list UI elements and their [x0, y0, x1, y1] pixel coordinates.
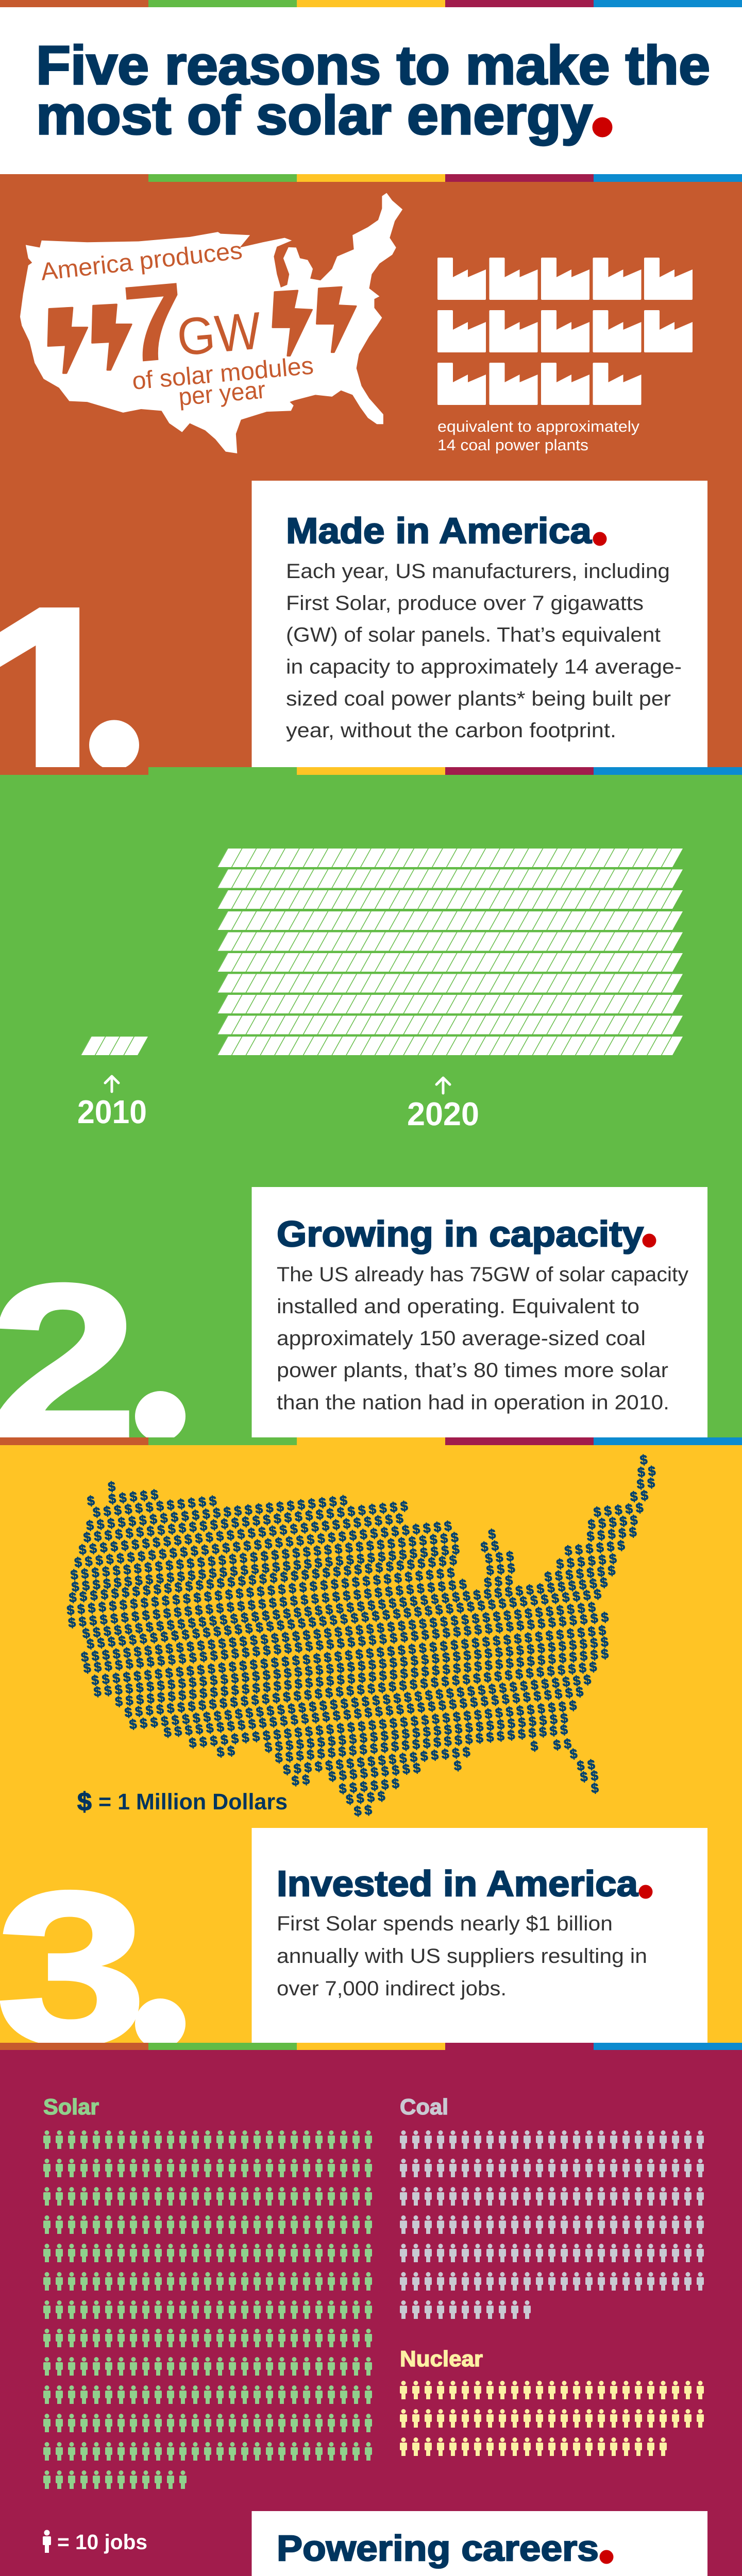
- card: invested in America text: over 7,000 indirect jobs.: [277, 1977, 507, 2000]
- legend: dollar scale: $: [77, 1787, 92, 1816]
- map: United States made of dollar signs: $$$: [483, 1572, 517, 1590]
- map: United States made of dollar signs: $$$$$$$$$$$$$$$$$$$$$$$$$$$$$$$$$$$$$$: [68, 1576, 470, 1631]
- map: United States made of dollar signs: $: [453, 1757, 465, 1774]
- card: made in America text: First Solar, produce over 7 gigawatts: [286, 592, 644, 615]
- map: United States made of dollar signs: $$$$$: [587, 1512, 642, 1532]
- map: United States with 7GW label: America produces: [39, 237, 244, 286]
- map: United States made of dollar signs: $$: [637, 1463, 660, 1480]
- card: made in America text: Made in America: [286, 511, 592, 551]
- map: United States made of dollar signs: $$$$$: [108, 1486, 162, 1507]
- map: United States made of dollar signs: $$$: [484, 1548, 517, 1566]
- title: most of solar energy: [36, 85, 593, 146]
- map: United States with 7GW label: of solar modules: [131, 352, 315, 395]
- card: made in America text: (GW) of solar panels. That’s equivalent: [286, 623, 661, 646]
- pictogram: nuclear jobs: Nuclear: [400, 2347, 483, 2371]
- chart: 2020 solar panels: [217, 849, 683, 1132]
- card: invested in America text: [251, 1828, 707, 2043]
- chart: 2020 solar panels: 2020: [407, 1095, 479, 1132]
- map: United States made of dollar signs: $$$$$$$: [544, 1562, 619, 1585]
- map: United States made of dollar signs: $$$$$$: [564, 1537, 629, 1558]
- map: United States made of dollar signs: $$$$$$: [338, 1775, 403, 1797]
- card: growing in capacity text: The US already has 75GW of solar capacity: [277, 1263, 688, 1286]
- map: United States made of dollar signs: $$$$$$$$$$$$$$$$$$$$$$$$$$$$$$$$$$$$$$$$$$$$$: [124, 1658, 601, 1720]
- pictogram: solar jobs: [43, 2095, 377, 2489]
- legend: one person equals 10 jobs: = 10 jobs: [57, 2530, 147, 2554]
- map: United States made of dollar signs: $$$$$$$$$$$$$$$$$$$$$$$$$$$$$$$$$$$$$$$$$$$$$$$$$$: [82, 1609, 612, 1676]
- card: growing in capacity text: [251, 1187, 707, 1437]
- card: growing in capacity text: than the nation had in operation in 2010.: [277, 1391, 669, 1414]
- map: United States made of dollar signs: $: [487, 1526, 499, 1542]
- map: United States made of dollar signs: $$$$$$$$$$$$$$$$$$$$$$$$$$$$$$$: [82, 1498, 412, 1545]
- card: invested in America text: Invested in America: [277, 1863, 638, 1904]
- panel: section 1 made in America: [0, 174, 742, 856]
- panel: section 3 invested in America: [0, 1437, 742, 2089]
- map: United States made of dollar signs: $$: [480, 1537, 502, 1555]
- map: United States made of dollar signs: $: [639, 1451, 651, 1468]
- map: United States made of dollar signs: $$$$$$$$$$$$$$$$$$$$$$$$$$$$$$$$$$$$$$$$$$$$: [128, 1671, 595, 1732]
- map: United States made of dollar signs: $$: [216, 1742, 239, 1760]
- map: United States made of dollar signs: $$$$$$$$$$$$$$$$$$$$$$$$$$$$$$$$$$$$$$$$$$$$$$$$$: [80, 1599, 599, 1665]
- map: United States made of dollar signs: [66, 1451, 660, 1819]
- card: made in America text: year, without the carbon footprint.: [286, 719, 616, 742]
- map: United States made of dollar signs: $$$$$$$$$$$$$$$$$$$$$$$$$$$$$$$: [78, 1510, 407, 1557]
- map: United States made of dollar signs: $: [530, 1738, 542, 1754]
- chart: 2010 solar panels: [77, 1037, 148, 1130]
- card: growing in capacity text: power plants, that’s 80 times more solar: [277, 1359, 668, 1382]
- card: growing in capacity text: approximately 150 average-sized coal: [277, 1327, 646, 1350]
- map: United States made of dollar signs: $$$$$: [593, 1499, 647, 1520]
- card: made in America text: in capacity to approximately 14 average-: [286, 655, 682, 678]
- caption: coal plant equivalence: [437, 418, 639, 454]
- map: United States made of dollar signs: $$$$$$$$$$$$$$$$$$$$$$$$$$$$$$$$$$$$: [74, 1518, 456, 1570]
- map: United States made of dollar signs: $$$$: [345, 1788, 389, 1807]
- map: United States made of dollar signs: $$: [579, 1767, 602, 1785]
- pictogram: coal jobs: Coal: [400, 2095, 448, 2120]
- chart: 2010 solar panels: 2010: [77, 1093, 147, 1130]
- map: United States made of dollar signs: $: [569, 1745, 581, 1762]
- map: United States made of dollar signs: $$$$$$$$$$$$$$$$$$$$$$$$$$$$: [274, 1721, 571, 1766]
- map: United States made of dollar signs: $$$$$$$$$$$$$$$$$$$$$$$$$$$$$$$$$$$$$: [188, 1697, 581, 1751]
- numeral 3: 3: [0, 1846, 147, 2089]
- map: United States made of dollar signs: $$$$$$$$$$$$: [92, 1493, 221, 1520]
- map: United States made of dollar signs: $$$$$$$$$: [328, 1759, 425, 1784]
- card: growing in capacity text: installed and operating. Equivalent to: [277, 1295, 639, 1318]
- card: growing in capacity text: Growing in capacity: [277, 1214, 644, 1254]
- map: United States made of dollar signs: $$$$$$$$$$$$$$$$$$$$$$$$$$$$$$$$$$$$$: [68, 1552, 461, 1605]
- map: United States made of dollar signs: $$$: [485, 1560, 519, 1578]
- legend: dollar scale: = 1 Million Dollars: [98, 1789, 288, 1815]
- pictogram: nuclear jobs: [400, 2347, 709, 2456]
- map: United States with 7GW label: 7: [119, 259, 190, 386]
- card: powering careers text: [251, 2511, 707, 2576]
- caption: coal plant equivalence: equivalent to approximately: [437, 418, 639, 435]
- map: United States made of dollar signs: $$$$$$$$$$$$$$$$$$$$$$$$$$$$$: [264, 1710, 572, 1755]
- pictogram: solar jobs: Solar: [43, 2095, 99, 2120]
- map: United States made of dollar signs: $$$$$$$$$$$$$$$$$$$$$$$$$$$$$$$$$$$$$$$$$$$$$$$$$$: [81, 1574, 611, 1641]
- map: United States with 7GW label: GW: [175, 301, 263, 367]
- card: made in America text: [251, 481, 707, 767]
- card: made in America text: Each year, US manufacturers, including: [286, 560, 670, 583]
- map: United States made of dollar signs: $$: [291, 1771, 313, 1789]
- caption: coal plant equivalence: 14 coal power plants: [437, 437, 588, 454]
- top colour strip: [0, 0, 742, 7]
- icons: 14 coal power plants: [437, 258, 693, 405]
- panel: section 2 growing in capacity: [0, 767, 742, 1483]
- title: [36, 35, 710, 146]
- map: United States made of dollar signs: $$$$$: [586, 1523, 640, 1544]
- map: United States made of dollar signs: $$$$$$$$$$$$$$$$$$$$$$$$$: [86, 1492, 351, 1533]
- map: United States made of dollar signs: $$$$$$$$$$$$$$$$$$$$$$$$$$$$$$$$$$$$$$$$: [163, 1684, 587, 1740]
- pictogram: coal jobs: [400, 2095, 709, 2319]
- map: United States made of dollar signs: $$$$$$: [555, 1550, 620, 1572]
- card: made in America text: sized coal power plants* being built per: [286, 687, 671, 710]
- map: United States made of dollar signs: $$$$$$$$$$$$$$$$$$: [282, 1743, 474, 1777]
- map: United States made of dollar signs: $$$$$$$$$$$$$$$$$$$$$$$$$$$$$$$$$$$$$$$$$$$$$$$$$: [86, 1586, 605, 1652]
- map: United States made of dollar signs: $$$$$$$$$$$$$$$$$$$$$$$$$$$$$$$$$$$$$$$$$$$$$$$$$: [91, 1622, 610, 1688]
- card: invested in America text: First Solar spends nearly $1 billion: [277, 1912, 613, 1935]
- map: United States made of dollar signs: $$$$$$$$$$$$$$$$$$$$$$$$$$$$$$$$$$$$$$$$$$$$$$$: [114, 1646, 612, 1709]
- map: United States made of dollar signs: $$: [353, 1802, 376, 1819]
- map: United States made of dollar signs: $: [107, 1478, 119, 1495]
- map: United States made of dollar signs: $$$$$$$$$$$$$$$$$$$$$$$$$$$$$$$$$$$$$: [71, 1541, 463, 1595]
- card: invested in America text: annually with US suppliers resulting in: [277, 1945, 647, 1968]
- map: United States made of dollar signs: $$: [629, 1487, 652, 1504]
- map: United States made of dollar signs: $: [87, 1493, 98, 1509]
- map: United States made of dollar signs: $: [591, 1780, 602, 1796]
- panel: section 4 powering careers: [0, 2043, 742, 2576]
- title: Five reasons to make the: [36, 35, 710, 96]
- card: powering careers text: Powering careers: [277, 2528, 599, 2568]
- map: United States made of dollar signs: $$: [636, 1475, 659, 1492]
- map: United States made of dollar signs: $$$$$$$$$$$$$$$$$$$$$$$$$$$$$$$$$$$$$: [70, 1529, 462, 1583]
- map: United States made of dollar signs: $$: [552, 1735, 575, 1753]
- map: United States with 7GW label: [20, 193, 402, 453]
- map: United States made of dollar signs: $$$$$$$$$$$$$$$$$$$$$$$$$$$$$$$$$$$$$$$$$$$$$$$$$: [93, 1634, 612, 1700]
- map: United States made of dollar signs: $$: [576, 1756, 599, 1774]
- map: United States with 7GW label: per year: [177, 376, 266, 411]
- map: United States made of dollar signs: $$$$$$$$$$$$$$$$$$$$$$$$$$$$$$$$$$$$$: [66, 1564, 459, 1618]
